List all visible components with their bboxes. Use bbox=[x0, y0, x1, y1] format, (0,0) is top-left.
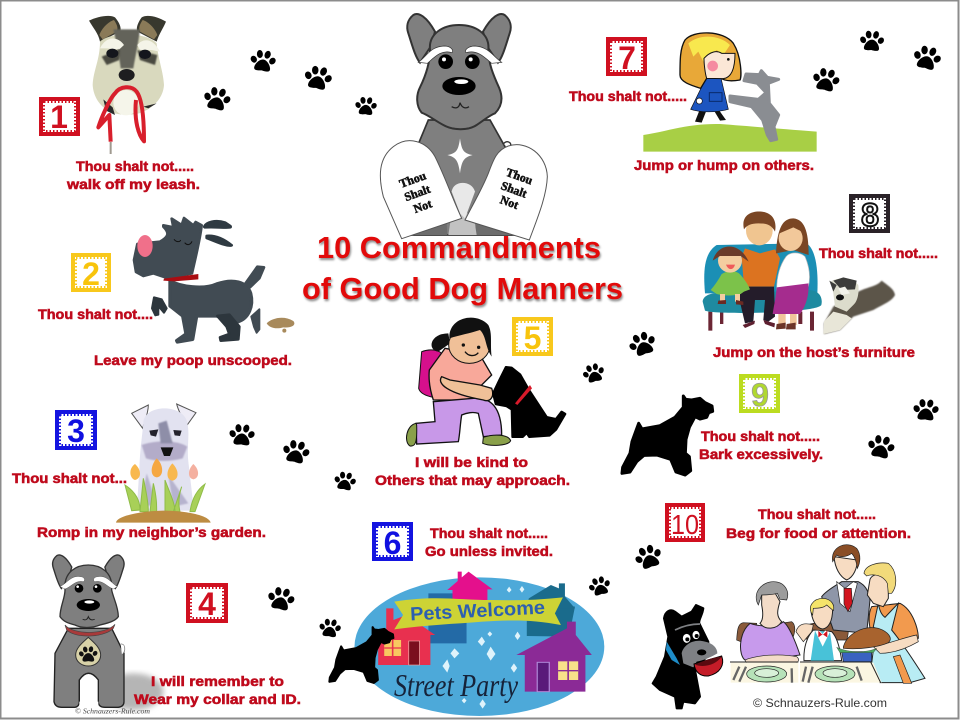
number badge 7: 7 bbox=[618, 40, 636, 76]
panel: commandment 8 bbox=[703, 196, 938, 360]
number badge 9: 9 bbox=[751, 377, 769, 413]
number badge 10: 10 bbox=[671, 509, 699, 540]
panel: commandment 2 bbox=[38, 218, 294, 368]
text: commandment 10: Beg for food or attention. bbox=[726, 525, 911, 541]
text: commandment 6: Go unless invited. bbox=[425, 543, 553, 559]
left tablet: Thou bbox=[397, 168, 428, 191]
text: commandment 1: walk off my leash. bbox=[66, 176, 200, 192]
panel: commandment 1 bbox=[41, 16, 200, 192]
right tablet: Not bbox=[498, 192, 521, 212]
panel: commandment 6 bbox=[329, 524, 604, 716]
panel: commandment 7 bbox=[569, 33, 817, 173]
number badge 2: 2 bbox=[82, 256, 100, 292]
number badge 9 bbox=[741, 376, 778, 413]
text: commandment 7: Jump or hump on others. bbox=[634, 157, 814, 173]
text: commandment 1 bbox=[66, 158, 200, 192]
title: of Good Dog Manners bbox=[302, 271, 623, 306]
title: 10 Commandments bbox=[317, 230, 601, 265]
right tablet bbox=[465, 145, 547, 240]
text: commandment 8: Thou shalt not..... bbox=[819, 245, 938, 261]
text: commandment 4: Wear my collar and ID. bbox=[134, 691, 301, 707]
number badge 1: 1 bbox=[50, 99, 68, 135]
text: commandment 3 bbox=[12, 470, 266, 540]
number badge 2 bbox=[73, 255, 109, 292]
central schnauzer holding tablets bbox=[380, 14, 547, 240]
panel: commandment 9 bbox=[622, 376, 823, 475]
number badge 8 bbox=[851, 196, 888, 233]
icon: grey schnauzer wearing collar and ID tag bbox=[53, 555, 163, 715]
left tablet bbox=[380, 141, 462, 239]
text: commandment 2: Thou shalt not.... bbox=[38, 306, 153, 322]
right tablet: Shalt bbox=[499, 178, 529, 201]
number badge 5 bbox=[514, 319, 551, 356]
text: commandment 9: Thou shalt not..... bbox=[701, 428, 820, 444]
icon: pets welcome street party sign: Pets Welcome bbox=[410, 598, 546, 626]
text: commandment 10 bbox=[726, 506, 911, 541]
text: commandment 2 bbox=[38, 306, 292, 368]
icon: kneeling girl petting black dog bbox=[407, 318, 565, 446]
text: commandment 9: Bark excessively. bbox=[699, 446, 823, 462]
number badge 3: 3 bbox=[67, 413, 85, 449]
text: commandment 8 bbox=[713, 245, 938, 360]
icon: girl with dog jumping on green hill bbox=[643, 33, 817, 152]
icon: black dog holding red bowl bbox=[653, 605, 723, 708]
icon: schnauzer head with red leash bbox=[89, 16, 166, 154]
icon: black schnauzer silhouette bbox=[622, 396, 713, 475]
title bbox=[302, 230, 623, 306]
text: commandment 7: Thou shalt not..... bbox=[569, 88, 687, 104]
text: commandment 3: Thou shalt not... bbox=[12, 470, 127, 486]
number badge 8: 8 bbox=[861, 197, 879, 233]
number badge 7 bbox=[608, 39, 645, 76]
icon: family at dinner table bbox=[730, 545, 925, 683]
text: commandment 2: Leave my poop unscooped. bbox=[94, 352, 292, 368]
text: commandment 6: Thou shalt not..... bbox=[430, 525, 548, 541]
icon: pets welcome street party sign bbox=[329, 572, 604, 716]
text: commandment 9 bbox=[699, 428, 823, 462]
left tablet: Shalt bbox=[402, 182, 432, 204]
panel: commandment 3 bbox=[12, 404, 266, 540]
panel: commandment 4 bbox=[53, 555, 301, 715]
panel: commandment 10 bbox=[653, 505, 925, 710]
icon: dark dog with pink tongue bbox=[134, 218, 294, 342]
text: commandment 5: Others that may approach. bbox=[375, 472, 570, 488]
text: commandment 1: Thou shalt not..... bbox=[76, 158, 194, 174]
number badge 1 bbox=[41, 99, 78, 135]
text: commandment 6 bbox=[425, 525, 553, 559]
icon: family on sofa bbox=[703, 212, 822, 331]
text: commandment 10: Thou shalt not..... bbox=[758, 506, 876, 522]
copyright credit: © Schnauzers-Rule.com bbox=[753, 696, 887, 710]
watermark: © Schnauzers-Rule.com bbox=[75, 707, 150, 715]
icon: pets welcome street party sign: Street Party bbox=[394, 667, 519, 703]
paw print trail bbox=[201, 29, 945, 638]
text: commandment 7 bbox=[569, 88, 814, 173]
icon: schnauzer among tulips bbox=[116, 404, 211, 523]
number badge 6: 6 bbox=[384, 525, 401, 561]
number badge 6 bbox=[374, 524, 411, 561]
text: commandment 3: Romp in my neighbor’s garden. bbox=[37, 524, 266, 540]
right tablet: Thou bbox=[504, 165, 535, 188]
left tablet: Not bbox=[411, 196, 434, 216]
icon: schnauzer lying down bbox=[823, 277, 895, 334]
text: commandment 4 bbox=[134, 673, 301, 707]
text: commandment 8: Jump on the host’s furniture bbox=[713, 344, 915, 360]
text: commandment 4: I will remember to bbox=[151, 673, 284, 689]
text: commandment 5 bbox=[375, 454, 570, 488]
text: commandment 5: I will be kind to bbox=[415, 454, 528, 470]
number badge 4: 4 bbox=[198, 586, 216, 622]
panel: commandment 5 bbox=[375, 318, 570, 488]
number badge 3 bbox=[57, 412, 95, 449]
number badge 4 bbox=[188, 585, 226, 622]
number badge 5: 5 bbox=[524, 320, 541, 356]
